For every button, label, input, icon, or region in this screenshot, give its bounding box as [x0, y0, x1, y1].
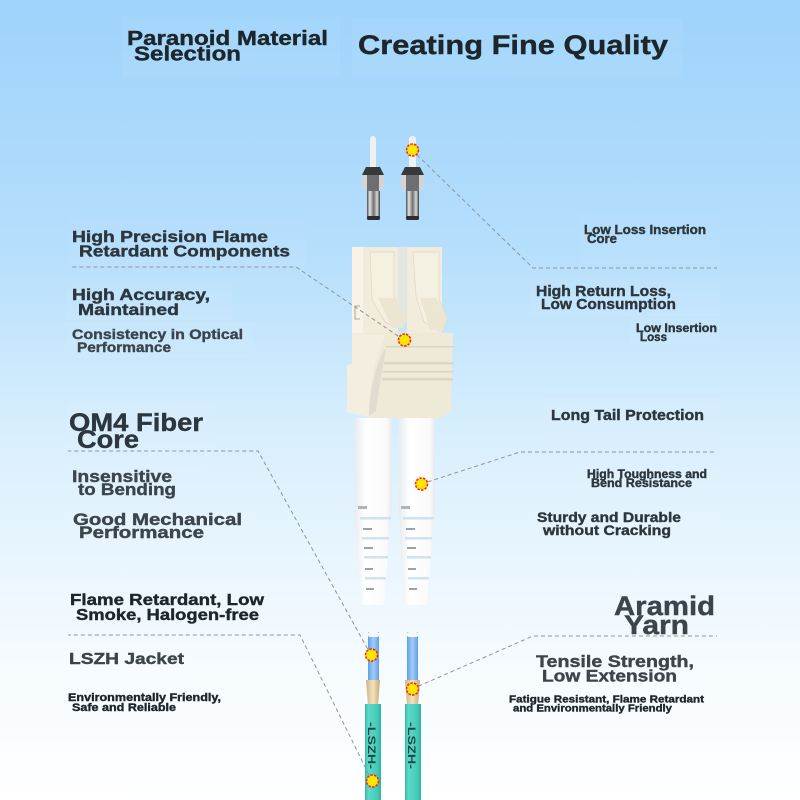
text block: low insertion loss: Loss — [640, 332, 667, 344]
text block: om4 fiber core: OM4 Fiber — [69, 409, 203, 437]
text block: insensitive to bending: to Bending — [78, 480, 176, 499]
text block: sturdy and durable: Sturdy and Durable — [537, 509, 681, 525]
text block: lszh jacket: LSZH Jacket — [69, 651, 185, 668]
text block: insensitive to bending — [66, 462, 202, 500]
text block: low loss insertion core: Core — [587, 232, 617, 246]
text block: low loss insertion core: Low Loss Insertion — [584, 223, 706, 237]
icon: ceramic ferrules with metal bodies — [362, 136, 424, 220]
text block: flame retardant low smoke — [66, 584, 274, 630]
text block: low insertion loss — [630, 318, 720, 348]
text block: high precision flame retardant components: High Precision Flame — [72, 229, 268, 246]
text block: high toughness and bend resistance — [582, 464, 720, 498]
text block: long tail protection: Long Tail Protection — [551, 408, 704, 424]
text block: long tail protection — [544, 398, 720, 444]
right cable: -LSZH- — [405, 722, 417, 769]
white strain-relief boots — [354, 418, 435, 605]
right boot — [399, 418, 435, 605]
rear housing — [352, 247, 398, 337]
text block: consistency in optical performance — [66, 322, 254, 358]
text block: om4 fiber core — [66, 402, 216, 454]
right ferrule — [401, 136, 424, 220]
text block: environmentally friendly: Environmentally Friendly, — [68, 692, 221, 704]
text block: high precision flame retardant components — [68, 218, 306, 266]
text block: high return loss low consumption: High Return Loss, — [536, 284, 671, 300]
text block: insensitive to bending: Insensitive — [72, 467, 172, 486]
right cable — [405, 632, 421, 800]
text block: high toughness and bend resistance: Bend Resistance — [591, 478, 692, 490]
text block: flame retardant low smoke: Flame Retardant, Low — [70, 592, 265, 609]
text block: sturdy and durable — [530, 504, 720, 540]
left boot — [354, 418, 392, 605]
text block: high accuracy maintained: High Accuracy, — [72, 287, 210, 304]
text block: consistency in optical performance: Consistency in Optical — [72, 326, 243, 342]
front body — [347, 333, 453, 418]
text block: low loss insertion core — [580, 214, 720, 264]
text block: high return loss low consumption — [530, 276, 720, 316]
heading: paranoid material selection: Selection — [134, 42, 241, 66]
leader lines — [68, 150, 717, 781]
text block: environmentally friendly: Safe and Reliable — [72, 702, 176, 714]
text block: tensile strength low extension: Tensile Strength, — [536, 653, 694, 671]
text block: high toughness and bend resistance: High Toughness and — [587, 469, 707, 481]
text block: good mechanical performance: Good Mechanical — [73, 510, 242, 529]
text block: tensile strength low extension — [530, 648, 720, 686]
left ferrule — [362, 136, 384, 220]
text block: lszh jacket — [64, 644, 224, 676]
text block: om4 fiber core: Core — [77, 426, 139, 454]
title: Creating Fine Quality — [358, 30, 668, 60]
text block: high accuracy maintained — [66, 280, 232, 320]
marker dots — [366, 144, 428, 787]
text block: consistency in optical performance: Performance — [77, 339, 171, 355]
latches — [370, 252, 404, 328]
optical fibre cables — [365, 632, 421, 800]
text block: high precision flame retardant components: Retardant Components — [79, 244, 290, 260]
text block: good mechanical performance: Performance — [79, 523, 204, 542]
text block: good mechanical performance — [66, 504, 256, 544]
text block: aramid yarn — [610, 580, 720, 640]
text block: flame retardant low smoke: Smoke, Halogen-free — [76, 607, 259, 624]
text block: aramid yarn: Yarn — [624, 610, 689, 640]
text block: fatigue resistant — [504, 690, 720, 720]
text block: sturdy and durable: without Cracking — [542, 522, 671, 538]
text block: tensile strength low extension: Low Extension — [542, 668, 677, 686]
left cable — [365, 632, 381, 800]
beige duplex LC connector — [347, 247, 453, 418]
text block: environmentally friendly — [64, 684, 230, 720]
left cable: -LSZH- — [365, 722, 377, 769]
text block: high return loss low consumption: Low Consumption — [541, 297, 676, 313]
heading: paranoid material selection — [122, 16, 340, 76]
text block: fatigue resistant: and Environmentally Friendly — [513, 702, 672, 714]
title — [352, 18, 682, 76]
text block: high accuracy maintained: Maintained — [78, 302, 179, 319]
text block: aramid yarn: Aramid — [614, 591, 715, 621]
text block: fatigue resistant: Fatigue Resistant, Flame Retardant — [509, 694, 705, 706]
heading: paranoid material selection: Paranoid Material — [127, 27, 328, 50]
text block: low insertion loss: Low Insertion — [636, 323, 717, 335]
